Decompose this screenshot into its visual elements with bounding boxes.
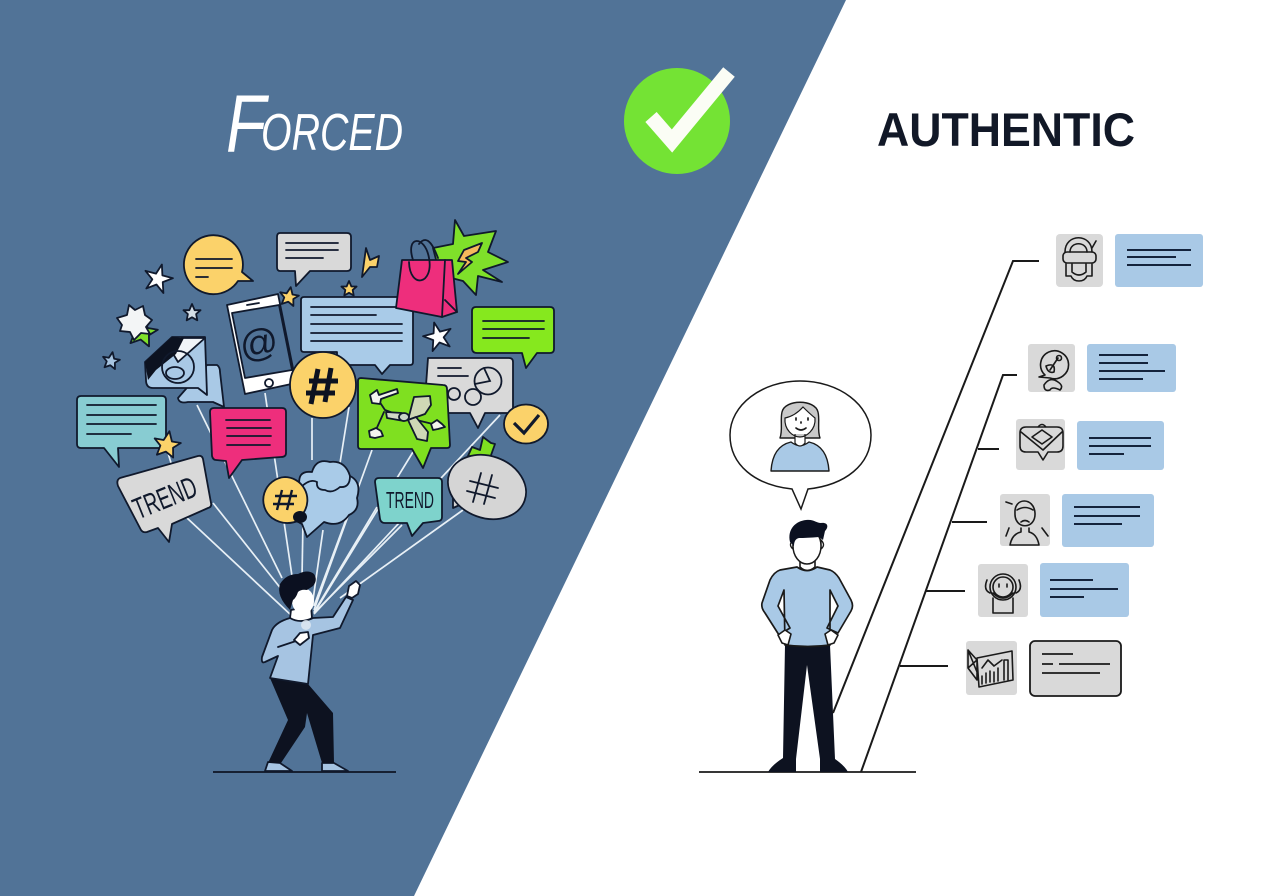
connector lines [833,261,1039,772]
woman hair [780,402,820,438]
title: forced: F [226,79,269,170]
forearm crease [278,641,296,647]
ground line [699,771,916,773]
speech bubble with woman avatar [730,381,871,509]
sweater [262,597,353,684]
row 4: person icon and note [1000,494,1154,547]
strings from person to bubbles [168,393,500,616]
row 3: envelope icon and note [1016,419,1164,470]
icon: phone with at sign: @ [236,320,282,368]
icon: teal trend bubble: TREND [386,487,434,513]
shoes [265,762,348,771]
ground line [213,771,396,773]
trousers and shoes [768,645,848,772]
icon: large blue speech bubble [301,297,413,374]
sweater [762,567,852,646]
title: forced [226,79,403,170]
icon: gray hashtag bubble [439,444,535,530]
icon: small light star [183,304,201,320]
icon: gray trend bubble [117,456,211,542]
woman face [785,407,815,446]
icon: yellow round speech bubble [184,235,253,294]
icon: gray speech bubble top [277,233,351,286]
icon: check circle [504,404,548,444]
icon: envelope with globe bubbles [145,337,224,407]
figure: confident person [699,520,916,772]
icon: teal trend bubble [375,478,442,536]
icon: green diagram bubble [358,378,450,468]
panel: forced blue diagonal [0,0,846,896]
icon: yellow hashtag circle [290,352,356,418]
icon: gray chart bubble [424,358,513,428]
icon: green starburst with lightning [433,220,508,295]
icon: green and white burst [117,305,160,347]
icon: phone with at sign [227,294,296,394]
row 2: bubble icon and note [1028,344,1176,392]
face [292,588,314,614]
icon: thought cloud [293,461,358,537]
icon: teal speech bubble left [77,396,166,467]
icon: lime speech bubble [472,307,554,368]
woman sweater [771,442,829,471]
title: forced: ORCED [261,104,403,162]
icon: white star [141,261,176,294]
glow at collar [301,620,311,630]
row 1: backpack icon and note [1056,234,1203,287]
icon: small yellow star [278,286,300,307]
figure: overwhelmed person [213,572,396,772]
icon: pink speech bubble [210,408,286,478]
icon: white star right [420,319,455,352]
woman features [796,418,808,430]
row 5: bearded face icon and note [978,563,1129,617]
icon: pink shopping bag [396,240,457,317]
hair [279,572,316,610]
ears [790,540,824,549]
hands [778,630,838,645]
icon: green check badge [624,68,730,174]
title: authentic: AUTHENTIC [877,103,1135,156]
neck [290,606,312,622]
trousers [268,678,334,763]
icon: small yellow hashtag bubble [263,477,307,523]
face [793,528,821,564]
icon: small blue star [101,351,121,370]
icon: green burst behind hashtag bubble [468,437,495,458]
icon: gray trend bubble: TREND [128,471,202,526]
row 6: chart icon and note [966,641,1121,696]
icon: yellow star left [152,429,183,458]
raised hand [347,581,360,598]
hair [789,520,827,546]
hand on chest [294,632,309,645]
icon: yellow spark [362,248,379,277]
icon: tiny yellow star [341,281,357,295]
neck [800,558,815,570]
